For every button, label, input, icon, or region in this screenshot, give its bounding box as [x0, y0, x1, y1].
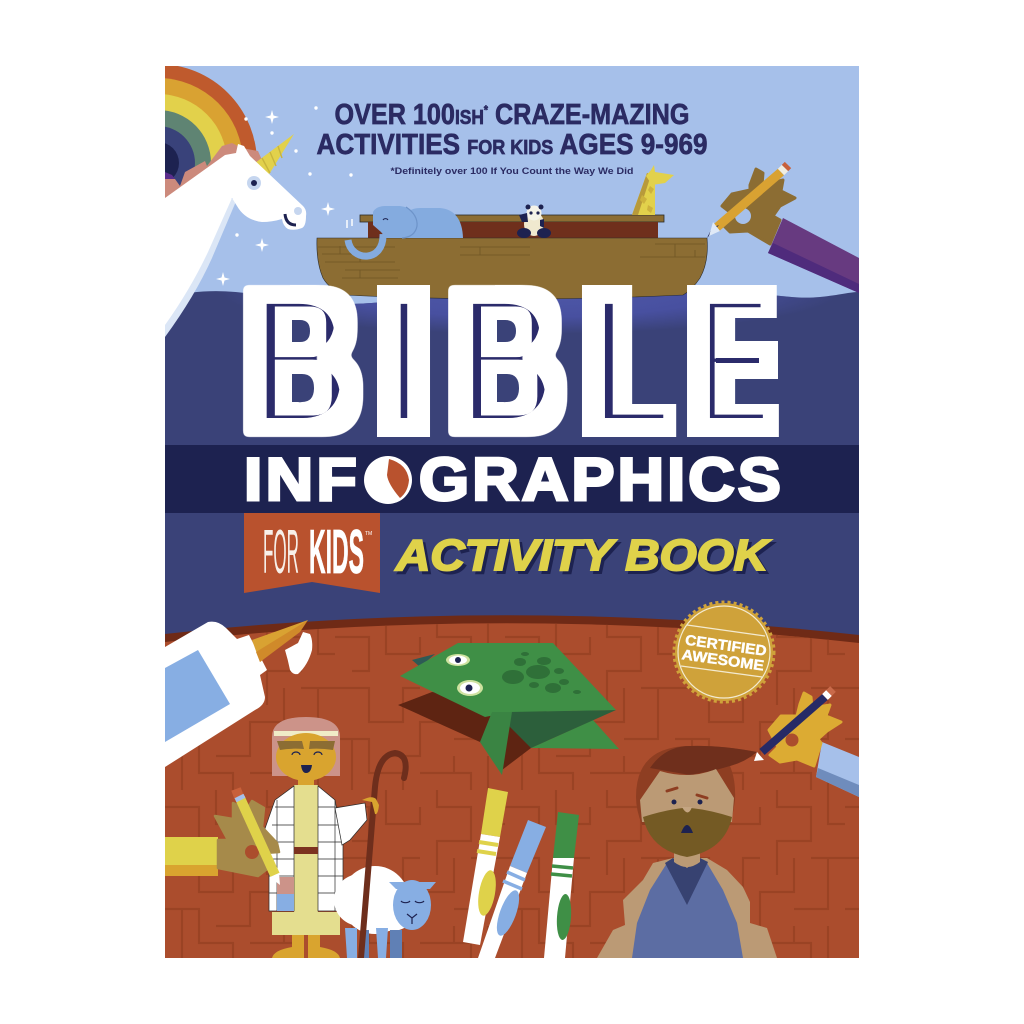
certified seal — [675, 603, 773, 701]
white letters: L — [590, 245, 663, 476]
yellow sleeve — [165, 837, 218, 865]
frog spots — [502, 652, 581, 694]
frog back foot — [531, 720, 619, 749]
Activity Book subtitle: ACTIVITY BOOK — [395, 531, 771, 580]
origami frog — [398, 643, 619, 775]
shepherd staff and hand — [361, 753, 406, 958]
giraffe — [632, 165, 674, 215]
right coat panel — [318, 786, 343, 911]
title INFOGRAPHICS: INF — [244, 446, 360, 513]
ark hull — [317, 238, 707, 299]
footnote: *Definitely over 100 If You Count the Way We Did — [390, 166, 634, 177]
head cloth — [272, 717, 340, 776]
headline line 1: * — [484, 103, 488, 117]
neck shade — [165, 198, 237, 337]
ark — [317, 165, 707, 299]
right arm — [335, 803, 367, 845]
coat grid — [269, 800, 343, 911]
mouth and nostril — [285, 214, 296, 225]
markers — [463, 788, 579, 958]
dark band — [165, 445, 859, 513]
sky background — [178, 66, 859, 304]
Activity Book subtitle: ACTIVITY BOOK — [398, 534, 774, 583]
head and neck — [165, 144, 306, 325]
stars — [216, 106, 353, 286]
inline letters: L — [590, 254, 673, 468]
title INFOGRAPHICS: GRAPHICS — [419, 446, 784, 513]
certified seal: CERTIFIED — [684, 633, 768, 660]
purple sleeve — [768, 218, 859, 293]
inline letters: B — [458, 255, 558, 468]
rainbow — [165, 66, 256, 186]
frog front foot — [480, 712, 512, 775]
gold pencil — [716, 172, 781, 228]
frog eyes — [446, 654, 483, 696]
For Kids banner: FOR — [263, 518, 299, 587]
eye — [247, 176, 261, 190]
belt — [294, 847, 318, 854]
white letters: B — [455, 246, 557, 476]
sheep — [334, 866, 436, 958]
hand — [722, 169, 795, 244]
headline line 1: CRAZE-MAZING — [488, 99, 690, 131]
blue robe — [632, 863, 743, 958]
shoulders — [597, 858, 777, 958]
brick maze ground — [165, 600, 859, 958]
yellow marker — [463, 788, 508, 945]
white letters: B — [250, 245, 353, 476]
left coat panel — [254, 786, 294, 911]
panda — [517, 204, 551, 238]
For Kids banner — [244, 513, 380, 593]
unicorn — [165, 134, 306, 337]
sheep head — [393, 880, 431, 930]
title INFOGRAPHICS: O — [366, 446, 410, 513]
inline letters — [266, 304, 763, 418]
inline letters: I — [386, 253, 422, 468]
navy pencil — [762, 697, 825, 752]
feet — [272, 935, 340, 958]
mane — [165, 143, 262, 198]
bearded man — [597, 746, 777, 958]
white letters — [242, 284, 779, 438]
horn — [255, 134, 294, 176]
ark planks — [318, 244, 705, 278]
green marker — [544, 812, 579, 958]
inline letters: E — [696, 254, 773, 468]
white letters: I — [384, 247, 423, 477]
title BIBLE — [250, 245, 778, 477]
sea — [165, 291, 859, 635]
frog shaded fold — [485, 710, 616, 748]
ark cabin — [360, 215, 664, 239]
headline line 2: ACTIVITIES FOR KIDS AGES 9-969 — [316, 129, 708, 161]
dress — [272, 785, 340, 935]
hand — [215, 801, 279, 876]
headline line 1: OVER 100ISH — [334, 99, 488, 131]
glue bottle — [165, 620, 312, 767]
yellow pencil — [240, 798, 275, 875]
elephant — [347, 206, 463, 256]
inline letters: B — [251, 253, 352, 468]
light blue sleeve — [816, 742, 859, 797]
For Kids banner: TM — [365, 531, 372, 537]
pie chart letter O — [364, 456, 412, 504]
hand — [769, 693, 841, 766]
frog body — [400, 643, 616, 717]
certified seal: AWESOME — [681, 647, 765, 675]
hand with pencil right — [754, 689, 859, 797]
shepherd — [254, 717, 367, 958]
face — [640, 769, 734, 822]
beard — [643, 808, 732, 857]
title INFOGRAPHICS — [246, 456, 780, 504]
hair — [636, 746, 757, 825]
white letters: E — [696, 245, 766, 476]
book cover: KIDS — [309, 518, 364, 587]
frog shadow — [398, 692, 531, 770]
neck — [674, 850, 700, 867]
hand with pencil left — [165, 789, 280, 885]
book cover — [165, 66, 859, 958]
facial features — [667, 788, 707, 798]
letter B counters — [292, 320, 519, 402]
blue marker — [478, 820, 546, 958]
Activity Book subtitle — [393, 538, 777, 574]
hand with pencil top right — [707, 165, 859, 293]
face — [276, 733, 336, 781]
